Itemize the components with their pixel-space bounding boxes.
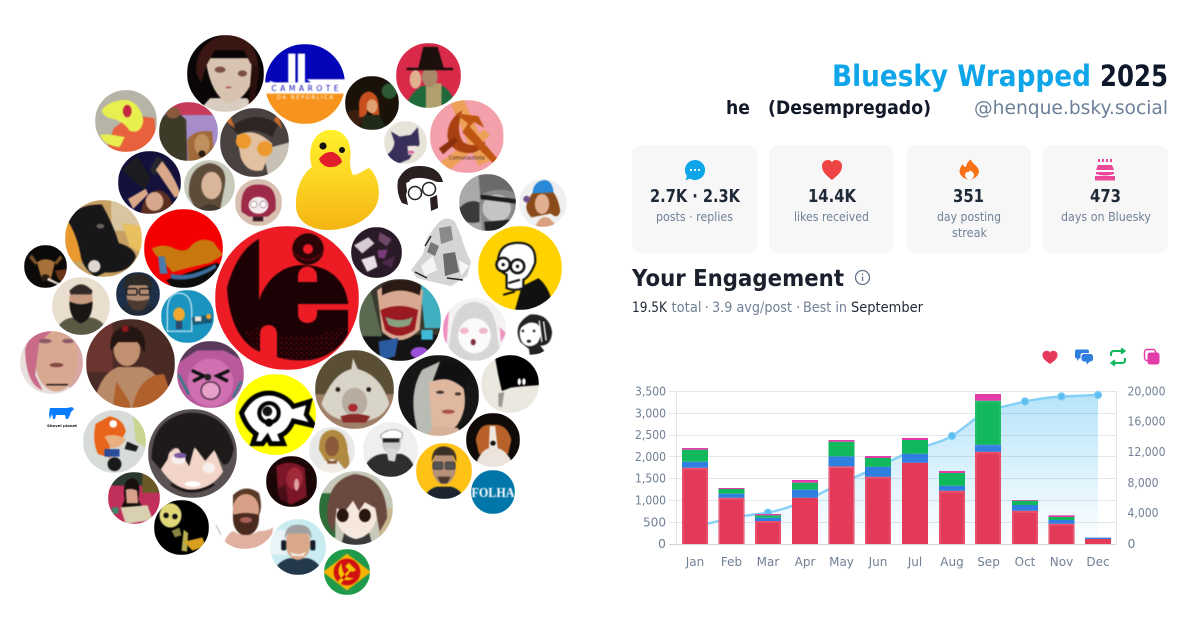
x axis line xyxy=(669,544,1116,546)
avatar: camarote logo: DA REPÚBLICA xyxy=(277,94,333,101)
avatar: white hair manga girl xyxy=(443,298,506,361)
bar: Oct xyxy=(1012,500,1038,546)
card: likes received xyxy=(769,145,894,253)
month labels: Aug xyxy=(940,555,964,569)
left axis labels: 3,000 xyxy=(635,406,666,420)
right axis labels: 4,000 xyxy=(1128,506,1158,520)
engagement summary: total xyxy=(672,300,702,316)
avatar: anime girl brown hair right xyxy=(319,471,393,545)
avatar: deer with cigarette xyxy=(24,245,67,288)
avatar: woman with clown makeup xyxy=(359,279,441,361)
avatar: camarote logo: CAMAROTE xyxy=(271,84,339,93)
month labels: May xyxy=(829,555,854,569)
icon: cake xyxy=(1095,159,1115,180)
label second line: streak xyxy=(952,225,988,240)
month labels: Oct xyxy=(1015,555,1036,569)
left axis labels: 0 xyxy=(658,537,666,551)
label: posts · replies xyxy=(656,209,733,224)
value: 473 xyxy=(1090,187,1121,207)
left axis labels: 1,500 xyxy=(635,472,666,486)
avatar: woman black and silver hair xyxy=(398,355,479,436)
avatar: woman with blue cap xyxy=(519,179,567,227)
left axis labels: 500 xyxy=(643,516,666,530)
cumulative area xyxy=(695,395,1098,544)
chart legend xyxy=(1042,348,1160,366)
avatar: blonde woman xyxy=(309,427,355,473)
avatar: red with orange otter xyxy=(144,209,223,288)
avatar: bearded man xyxy=(52,277,110,335)
icon: speech bubble xyxy=(685,160,705,180)
avatar: rubber duck xyxy=(296,130,379,230)
avatar: red hair illustration xyxy=(345,76,399,130)
engagement summary: 3.9 avg/post xyxy=(712,300,792,316)
avatar: man with glasses xyxy=(116,272,160,316)
avatar: woman pink hair xyxy=(20,331,83,394)
month labels: Jun xyxy=(868,555,887,569)
month labels: Feb xyxy=(721,555,742,569)
avatar: man with headset xyxy=(270,519,326,575)
left axis labels: 3,500 xyxy=(635,384,666,398)
card: day posting streak xyxy=(906,145,1031,253)
avatar: wolf sketch xyxy=(411,218,471,286)
heading: your engagement: Your Engagement xyxy=(631,264,844,292)
label: day posting xyxy=(937,209,1001,224)
card: days on Bluesky xyxy=(1043,145,1168,253)
engagement summary: · xyxy=(796,300,800,316)
right axis labels: 8,000 xyxy=(1128,476,1158,490)
legend icon: replies xyxy=(1075,350,1093,364)
avatar: red dark face xyxy=(266,456,317,507)
month labels: Apr xyxy=(795,555,815,569)
avatar: man with tall hat xyxy=(396,43,461,108)
avatar: grey portrait split xyxy=(459,174,516,231)
value: 14.4K xyxy=(808,187,857,207)
avatar: doodle girl xyxy=(516,314,553,355)
bar: Dec xyxy=(1085,537,1111,544)
avatar: yellow rat with headphones xyxy=(95,90,157,152)
avatar: dark purple anime xyxy=(351,227,402,278)
value: 2.7K · 2.3K xyxy=(650,187,741,207)
avatar: skeleton trumpet xyxy=(154,500,209,555)
avatar: black dog xyxy=(65,200,142,277)
legend icon: reposts xyxy=(1111,348,1125,366)
left axis labels: 2,000 xyxy=(635,450,666,464)
month labels: Jan xyxy=(685,555,704,569)
bar: Aug xyxy=(939,471,965,546)
avatar: FOLHA logo xyxy=(471,470,515,514)
bar: Jan xyxy=(682,448,708,545)
avatar: fish on yellow xyxy=(235,374,316,455)
avatar: brazil flag hammer and sickle xyxy=(324,549,370,595)
avatar: girl with orange glasses xyxy=(220,108,289,177)
avatar cloud xyxy=(20,35,567,595)
avatar: telescope illustration xyxy=(118,151,181,214)
icon: flame xyxy=(960,160,979,180)
user display name: he xyxy=(726,97,750,119)
avatar: woman on pink bed xyxy=(108,472,160,524)
bar: Feb xyxy=(718,488,744,545)
engagement summary: · xyxy=(704,300,709,316)
avatar: man with dog xyxy=(159,102,218,161)
logo: blue cow: Shovel planet xyxy=(47,423,77,428)
month labels: Dec xyxy=(1086,555,1110,569)
cumulative line xyxy=(695,395,1098,527)
avatar: man black and white xyxy=(363,422,418,477)
avatar: blue lightbulb in cage xyxy=(161,290,214,343)
month labels: Mar xyxy=(757,555,779,569)
avatar: glasses doodle xyxy=(398,166,443,211)
grid xyxy=(669,391,1116,544)
avatar: central he logo xyxy=(215,226,359,370)
left axis labels xyxy=(635,384,666,551)
bar: Nov xyxy=(1048,515,1074,546)
bar: Jun xyxy=(865,456,891,546)
avatar: black hair anime girl xyxy=(148,409,237,498)
avatar: crash bandicoot xyxy=(83,410,146,473)
avatar: collie xyxy=(466,413,520,467)
avatar: pink hair anime xyxy=(235,179,282,226)
card: posts and replies xyxy=(632,145,757,253)
avatar: pink scribble face xyxy=(177,341,244,408)
bar: Apr xyxy=(792,480,818,544)
engagement summary: 19.5K xyxy=(632,300,668,316)
right axis labels: 12,000 xyxy=(1128,445,1166,459)
label: likes received xyxy=(794,209,869,224)
right axis labels: 0 xyxy=(1128,537,1136,551)
label: days on Bluesky xyxy=(1061,209,1152,224)
avatar: anime girl brown hair xyxy=(187,35,264,112)
engagement summary: September xyxy=(851,300,923,316)
user handle: @henque.bsky.social xyxy=(974,97,1168,119)
bar: Jul xyxy=(902,438,928,544)
user display name: (Desempregado) xyxy=(768,97,931,119)
avatar: hammer and sickle pink xyxy=(430,100,504,173)
month labels: Nov xyxy=(1050,555,1073,569)
avatar: hamster xyxy=(315,350,394,429)
month labels: Sep xyxy=(977,555,1000,569)
avatar: bearded man illustration xyxy=(213,485,277,549)
title: Bluesky Wrapped xyxy=(832,59,1091,93)
left axis labels: 1,000 xyxy=(635,494,666,508)
title: 2025 xyxy=(1100,59,1168,93)
bar: Mar xyxy=(755,514,781,545)
line markers xyxy=(764,391,1102,516)
icon: info xyxy=(856,270,870,284)
avatar: skull on yellow xyxy=(478,226,562,310)
icon: heart xyxy=(822,160,842,180)
avatar: man on yellow xyxy=(416,443,472,499)
month labels: Jul xyxy=(907,555,922,569)
avatar: classical painting woman xyxy=(86,319,175,408)
bar: May xyxy=(828,440,854,546)
logo: blue cow xyxy=(47,407,77,428)
right axis labels: 20,000 xyxy=(1128,384,1166,398)
avatar: woman with curly hair xyxy=(184,160,235,211)
avatar: black blob on beige xyxy=(481,355,539,413)
chart: monthly engagement xyxy=(635,384,1166,569)
avatar: hammer and sickle pink: Comunautista xyxy=(449,155,485,161)
legend icon: likes xyxy=(1042,351,1058,364)
right axis labels: 16,000 xyxy=(1128,414,1166,428)
avatar: camarote logo xyxy=(265,44,345,124)
bar: Sep xyxy=(975,394,1001,546)
left axis labels: 2,500 xyxy=(635,428,666,442)
engagement summary: Best in xyxy=(803,300,847,316)
avatar: cat xyxy=(384,121,427,164)
value: 351 xyxy=(953,187,984,207)
right axis labels xyxy=(1128,384,1166,551)
month labels xyxy=(685,555,1110,569)
legend icon: quotes xyxy=(1144,350,1160,364)
